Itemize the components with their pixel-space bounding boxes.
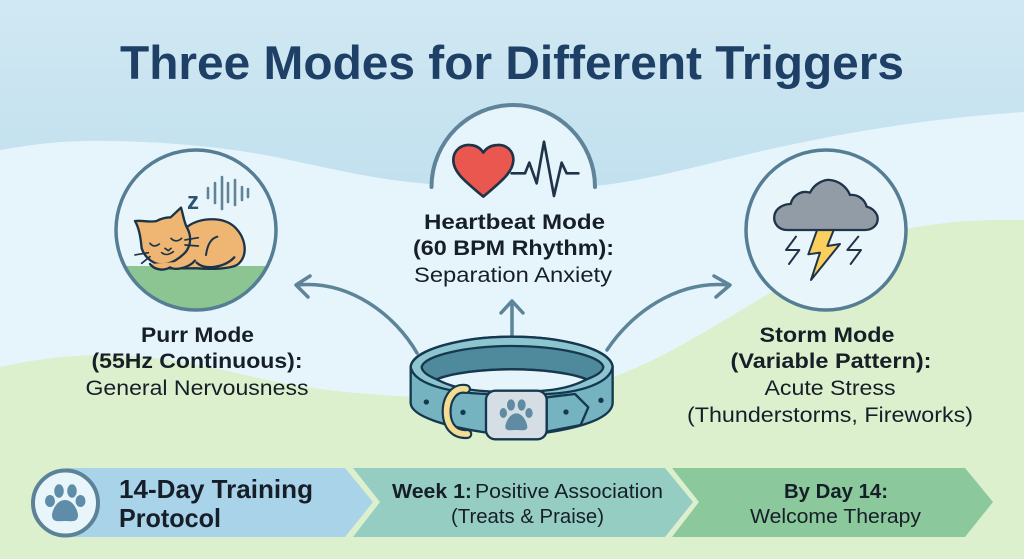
arrow: to heartbeat mode	[501, 301, 523, 336]
text: week 1: Week 1:	[392, 480, 472, 503]
banner step 3: by day 14	[672, 468, 993, 537]
text: by day 14: Welcome Therapy	[750, 505, 922, 528]
text: storm mode: Acute Stress	[764, 376, 896, 400]
arrow: to purr mode	[296, 276, 417, 353]
background: sky	[0, 0, 1024, 220]
background: pale wave	[0, 112, 1024, 559]
text: training protocol: Protocol	[119, 503, 221, 533]
background: green hills	[0, 220, 1024, 559]
icon: z letter: z	[187, 188, 199, 215]
icon: heart with pulse	[432, 105, 595, 197]
text: storm mode	[687, 323, 973, 427]
text: purr mode: Purr Mode	[141, 323, 254, 347]
banner step 2: week 1	[353, 468, 693, 537]
text: storm mode: (Thunderstorms, Fireworks)	[687, 403, 973, 427]
text: by day 14: By Day 14:	[784, 480, 888, 503]
icon: sleeping cat	[110, 150, 282, 316]
banner step 1: training protocol	[33, 468, 373, 537]
text: heartbeat mode	[413, 210, 614, 287]
text: heartbeat mode: Separation Anxiety	[414, 263, 612, 287]
text: heartbeat mode: Heartbeat Mode	[424, 210, 605, 234]
icon: storm cloud	[746, 150, 906, 310]
text: purr mode	[86, 323, 308, 400]
text: training protocol	[119, 474, 313, 533]
text: week 1	[392, 480, 663, 528]
text: training protocol: 14-Day Training	[119, 474, 313, 504]
icon: smart collar	[411, 337, 613, 439]
title: Three Modes for Different Triggers	[120, 36, 904, 89]
icon: sound wave	[208, 177, 248, 209]
text: storm mode: (Variable Pattern):	[730, 349, 932, 373]
arrow: to storm mode	[607, 276, 730, 350]
text: heartbeat mode: (60 BPM Rhythm):	[413, 236, 614, 260]
text: storm mode: Storm Mode	[760, 323, 895, 347]
text: by day 14	[750, 480, 922, 528]
text: week 1: (Treats & Praise)	[451, 505, 604, 528]
text: purr mode: General Nervousness	[86, 376, 308, 400]
text: purr mode: (55Hz Continuous):	[92, 349, 302, 373]
text: week 1: Positive Association	[475, 480, 663, 503]
icon: paw badge	[33, 470, 98, 536]
